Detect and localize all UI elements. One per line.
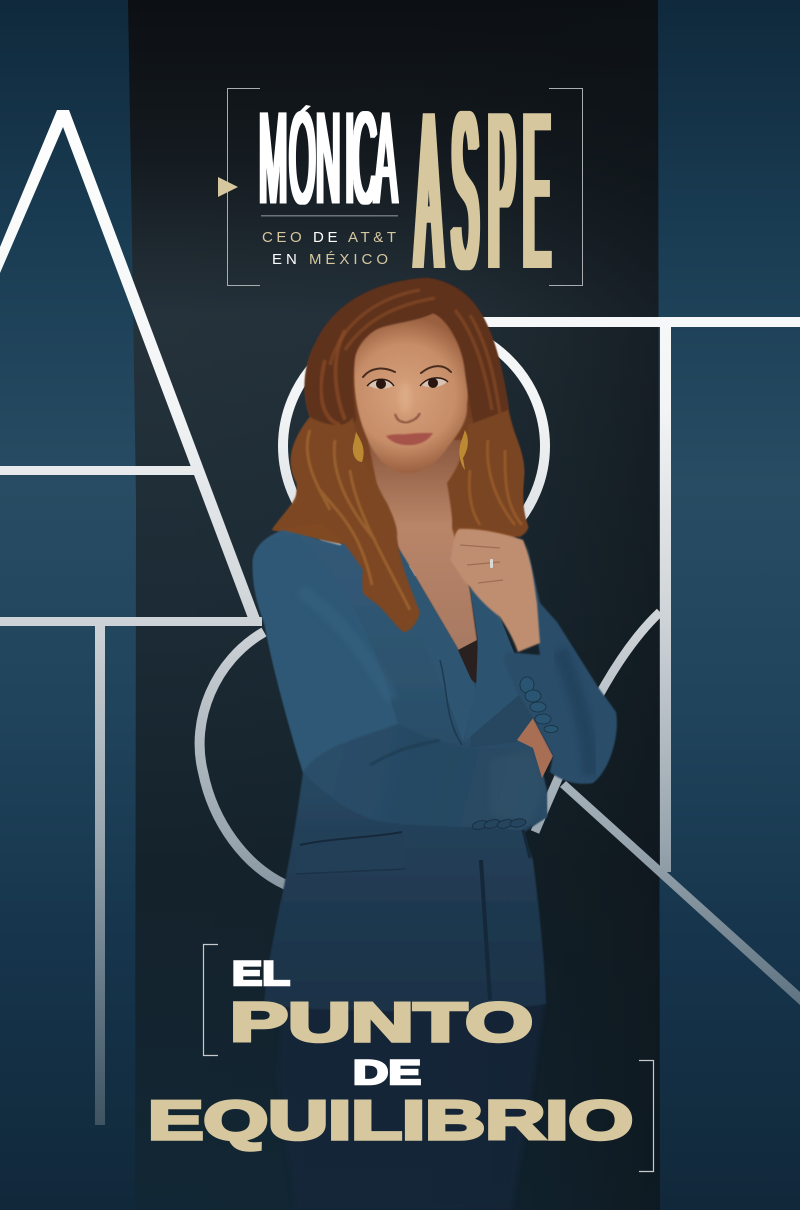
jacket vent	[481, 860, 490, 1000]
lace top	[458, 640, 478, 684]
nose	[395, 413, 420, 423]
role line 1: CEO DE AT&T	[262, 229, 396, 246]
accent mark on Ó	[299, 105, 311, 112]
eyebrows	[363, 366, 451, 377]
headline bracket left	[204, 944, 218, 1056]
frame bracket left	[228, 88, 260, 286]
trousers	[278, 1000, 545, 1210]
ring	[490, 559, 493, 568]
right lapel	[464, 587, 519, 742]
hair top highlights	[330, 290, 500, 415]
sleeve buttons lower	[471, 818, 527, 831]
pocket flap	[295, 833, 405, 874]
back hair	[272, 278, 528, 560]
eyes	[367, 378, 448, 389]
name: Aspe: ASPE	[416, 66, 549, 317]
line art: right letter T and diagonal	[482, 317, 800, 1005]
raised arm sleeve	[503, 545, 617, 784]
header block	[218, 88, 583, 286]
headline word: El: EL	[232, 955, 290, 993]
headline word: Equilibrio: EQUILIBRIO	[148, 1089, 633, 1151]
headline block	[148, 944, 654, 1172]
headline word: Punto: PUNTO	[230, 991, 533, 1053]
frame bracket right	[549, 88, 582, 286]
jacket body	[253, 522, 547, 1011]
lips	[386, 433, 433, 445]
headline bracket right	[639, 1060, 654, 1172]
portrait of Mónica Aspe	[253, 278, 617, 1210]
face	[354, 313, 468, 473]
line art: letter A	[0, 110, 262, 626]
neck and chest	[368, 440, 477, 685]
left forearm	[303, 724, 547, 830]
line art: ampersand ring	[200, 321, 660, 885]
role line 2: EN MÉXICO	[272, 251, 388, 268]
jacket fill behind raised arm	[470, 650, 534, 748]
blouse inset	[462, 670, 476, 740]
jacket side pocket detail	[523, 830, 530, 858]
upper arm	[253, 535, 398, 772]
cuff buttons	[520, 677, 558, 732]
wrist under arm	[517, 718, 553, 778]
hair right	[447, 410, 528, 537]
hair strands left	[272, 417, 420, 632]
line art: letter T stem	[95, 626, 105, 1125]
headline word: De: DE	[353, 1054, 421, 1092]
name: Mónica: MÓNICA	[259, 85, 397, 232]
hand	[450, 529, 540, 652]
divider	[261, 215, 398, 216]
arrow marker	[218, 177, 238, 197]
earrings	[353, 432, 364, 462]
left lapel	[383, 522, 476, 742]
hair top sweep	[305, 278, 508, 440]
